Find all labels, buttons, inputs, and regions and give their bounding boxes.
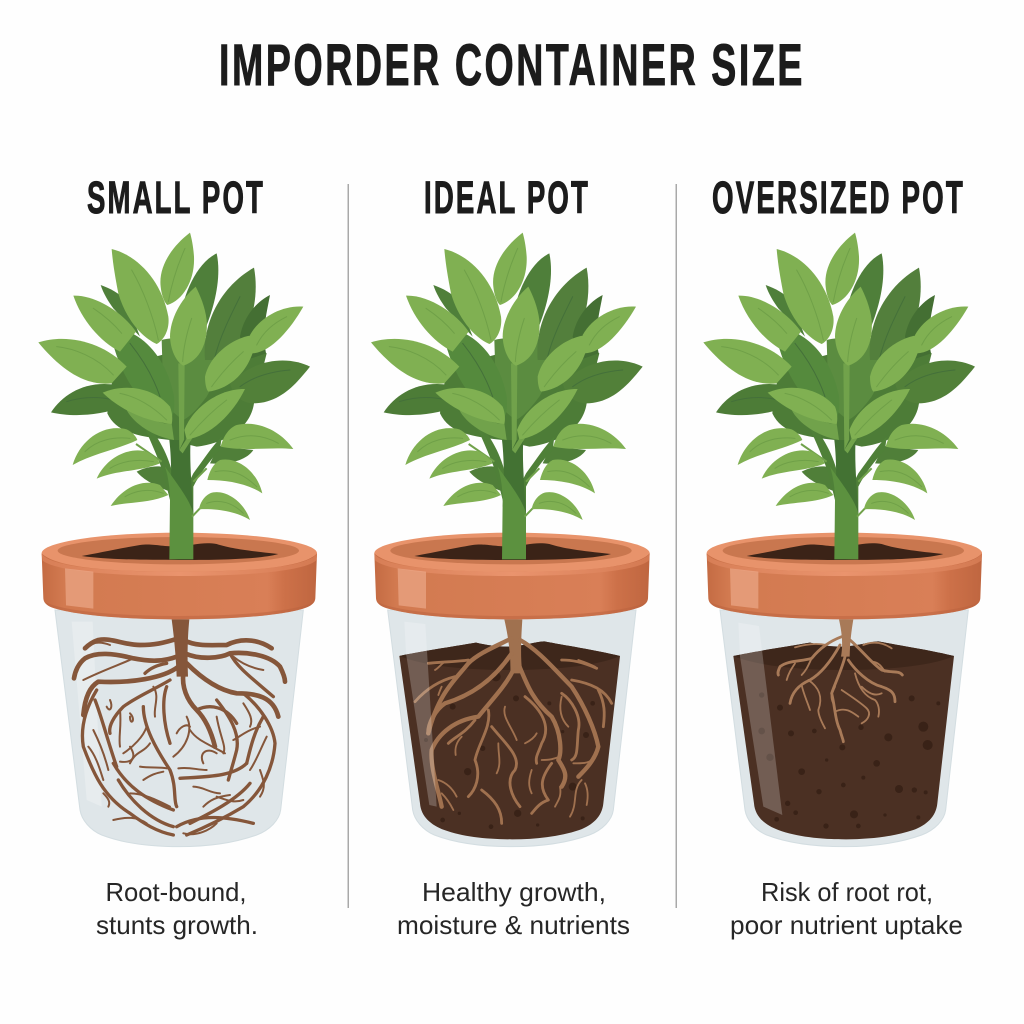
plant [371,233,643,559]
divider: left [348,184,349,908]
pot: glass with healthy roots in soil [374,533,650,847]
panel: oversized pot [703,172,982,940]
pot: glass with root-bound roots [42,533,317,847]
heading: small pot: SMALL POT [87,172,265,223]
plant [703,233,975,559]
caption: ideal pot: Healthy growth, [422,877,606,907]
caption: ideal pot [397,877,630,940]
panel: ideal pot [371,172,650,940]
caption: small pot [96,877,258,940]
plant [38,233,310,559]
divider: right [676,184,677,908]
caption: small pot: Root-bound, [106,877,246,907]
panel: small pot [38,172,317,940]
pot: glass with shallow roots in deep soil [707,533,982,847]
heading: ideal pot: IDEAL POT [424,172,590,223]
caption: small pot: stunts growth. [96,910,258,940]
caption: ideal pot: moisture & nutrients [397,910,630,940]
caption: oversized pot: poor nutrient uptake [730,910,963,940]
caption: oversized pot [730,877,963,940]
caption: oversized pot: Risk of root rot, [761,877,933,907]
